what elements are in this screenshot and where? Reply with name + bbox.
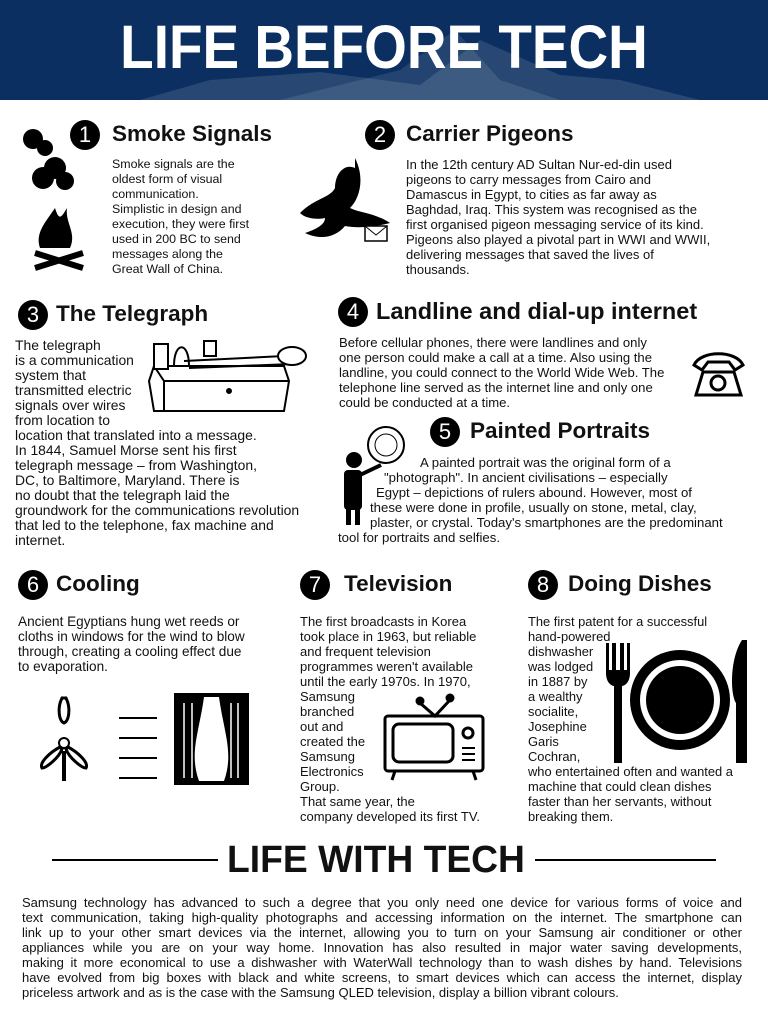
panel: telegraph (15, 300, 307, 548)
number 8: 8 (537, 572, 549, 597)
icon: telephone (692, 352, 745, 396)
text: Electronics (300, 764, 364, 779)
number 4 (338, 297, 368, 327)
text: life with tech: have evolved from big boxes with black and white screens, to smart devices which can access the internet, display (22, 970, 742, 985)
text (339, 335, 664, 410)
text: Great Wall of China. (112, 262, 223, 276)
panel: carrier pigeons (300, 120, 710, 277)
icon: wind lines (119, 717, 157, 779)
text: messages along the (112, 247, 223, 261)
heading: Carrier Pigeons (406, 121, 574, 146)
number 1 (70, 120, 100, 150)
text: company developed its first TV. (300, 809, 480, 824)
number 1: 1 (79, 122, 91, 147)
text: life with tech: appliances while you are on your way home. Innovation has also resulted in major water saving developments, (22, 940, 742, 955)
text: Garis (528, 734, 559, 749)
panel: painted portraits: Egypt – depictions of rulers abound. However, most of (376, 485, 692, 500)
text: until the early 1970s. In 1970, (300, 674, 471, 689)
panel: painted portraits: "photograph". In ancient civilisations – especially (384, 470, 668, 485)
text: and frequent television (300, 644, 431, 659)
text: life with tech: Samsung technology has advanced to such a degree that you only need one device for various forms of voice and (22, 895, 742, 910)
heading: The Telegraph (56, 301, 208, 326)
number 5: 5 (439, 419, 451, 444)
panel: painted portraits: tool for portraits and selfies. (338, 530, 500, 545)
number 2 (365, 120, 395, 150)
text: programmes weren't available (300, 659, 473, 674)
text: Damascus in Egypt, to cities as far away as (406, 187, 657, 202)
icon: plate and cutlery (606, 640, 747, 763)
text (15, 337, 299, 548)
text: from location to (15, 412, 110, 428)
text: The first broadcasts in Korea (300, 614, 466, 629)
panel: painted portraits: these were done in profile, usually on stone, metal, clay, (370, 500, 697, 515)
text: out and (300, 719, 343, 734)
text: system that (15, 367, 86, 383)
text: oldest form of visual (112, 172, 222, 186)
number 2: 2 (374, 122, 386, 147)
text: The first patent for a successful (528, 614, 707, 629)
text: Samsung (300, 689, 355, 704)
header banner (0, 0, 768, 100)
number 3: 3 (27, 302, 39, 327)
panel: smoke signals (23, 120, 272, 276)
text: is a communication (15, 352, 134, 368)
icon: painter (344, 426, 405, 525)
text (300, 614, 480, 824)
text: location that translated into a message. (15, 427, 257, 443)
text: telephone line served as the internet line and only one (339, 380, 653, 395)
text: no doubt that the telegraph laid the (15, 487, 230, 503)
icon: telegraph key (148, 340, 307, 412)
text: life with tech (22, 895, 742, 1000)
text: through, creating a cooling effect due (18, 644, 241, 659)
text (18, 614, 245, 674)
text: That same year, the (300, 794, 415, 809)
text: Baghdad, Iraq. This system was recognised as the (406, 202, 697, 217)
text: Cochran, (528, 749, 580, 764)
number 4: 4 (347, 299, 359, 324)
icon: tv (384, 694, 484, 780)
text: took place in 1963, but reliable (300, 629, 476, 644)
panel: cooling (18, 570, 249, 785)
heading: Doing Dishes (568, 571, 712, 596)
heading: Smoke Signals (112, 121, 272, 146)
text (406, 157, 710, 277)
text: Simplistic in design and (112, 202, 241, 216)
text (528, 614, 733, 824)
text (112, 157, 249, 276)
text: Samsung (300, 749, 355, 764)
text: to evaporation. (18, 659, 108, 674)
text: first organised pigeon messaging service of its kind. (406, 217, 704, 232)
text: thousands. (406, 262, 470, 277)
text: life with tech: text communication, taking high-quality photographs and accessing information on the internet. The smartphone can (22, 910, 742, 925)
text: branched (300, 704, 354, 719)
panel: painted portraits: plaster, or crystal. Today's smartphones are the predominant (370, 515, 723, 530)
text: cloths in windows for the wind to blow (18, 629, 245, 644)
icon: pigeon (300, 158, 390, 242)
title: LIFE BEFORE TECH (120, 13, 648, 81)
text: landline, you could connect to the World Wide Web. The (339, 365, 664, 380)
heading: Painted Portraits (470, 418, 650, 443)
text: dishwasher (528, 644, 593, 659)
number 6: 6 (27, 572, 39, 597)
heading: life with tech: LIFE WITH TECH (227, 839, 525, 881)
number 6 (18, 570, 48, 600)
text: life with tech: making it more economical to use a dishwasher with WaterWall technology than to wash dishes by hand. Televisions (22, 955, 742, 970)
text: one person could make a call at a time. Also using the (339, 350, 652, 365)
number 5 (430, 417, 460, 447)
text: a wealthy (528, 689, 582, 704)
text: Ancient Egyptians hung wet reeds or (18, 614, 239, 629)
icon: curtains (174, 693, 249, 785)
icon: smoke and fire (23, 129, 84, 271)
number 3 (18, 300, 48, 330)
text: Before cellular phones, there were landlines and only (339, 335, 647, 350)
text: machine that could clean dishes (528, 779, 711, 794)
text: telegraph message – from Washington, (15, 457, 257, 473)
text: was lodged (528, 659, 593, 674)
text: who entertained often and wanted a (528, 764, 733, 779)
text: used in 200 BC to send (112, 232, 241, 246)
text: could be conducted at a time. (339, 395, 510, 410)
heading: Cooling (56, 571, 140, 596)
text: groundwork for the communications revolution (15, 502, 299, 518)
number 7: 7 (309, 572, 321, 597)
text: Smoke signals are the (112, 157, 235, 171)
text: signals over wires (15, 397, 125, 413)
text: faster than her servants, without (528, 794, 711, 809)
text: socialite, (528, 704, 578, 719)
text: created the (300, 734, 365, 749)
heading: Landline and dial-up internet (376, 298, 697, 324)
text: breaking them. (528, 809, 613, 824)
text: The telegraph (15, 337, 101, 353)
text: Pigeons also played a pivotal part in WWI and WWII, (406, 232, 710, 247)
text: A painted portrait was the original form of a (420, 455, 671, 470)
panel: doing dishes (528, 570, 747, 824)
panel: landline (338, 297, 745, 410)
number 7 (300, 570, 330, 600)
text: Group. (300, 779, 340, 794)
text: communication. (112, 187, 199, 201)
text: life with tech: link up to your other smart devices via the internet, allowing you to turn on your Samsung air conditioner or other (22, 925, 742, 940)
text: life with tech: priceless artwork and as is the case with the Samsung QLED television, display a billion vibrant colours. (22, 985, 619, 1000)
text: in 1887 by (528, 674, 588, 689)
text: internet. (15, 532, 65, 548)
panel: painted portraits (338, 417, 723, 545)
text: delivering messages that saved the lives of (406, 247, 654, 262)
text: Josephine (528, 719, 587, 734)
text: pigeons to carry messages from Cairo and (406, 172, 651, 187)
text: In 1844, Samuel Morse sent his first (15, 442, 237, 458)
text: In the 12th century AD Sultan Nur-ed-din used (406, 157, 672, 172)
text: transmitted electric (15, 382, 132, 398)
panel: television (300, 570, 484, 824)
icon: windmill (40, 696, 88, 781)
heading: Television (344, 571, 452, 596)
text: execution, they were first (112, 217, 249, 231)
text: DC, to Baltimore, Maryland. There is (15, 472, 239, 488)
number 8 (528, 570, 558, 600)
text: that led to the telephone, fax machine and (15, 517, 274, 533)
text: hand-powered (528, 629, 610, 644)
